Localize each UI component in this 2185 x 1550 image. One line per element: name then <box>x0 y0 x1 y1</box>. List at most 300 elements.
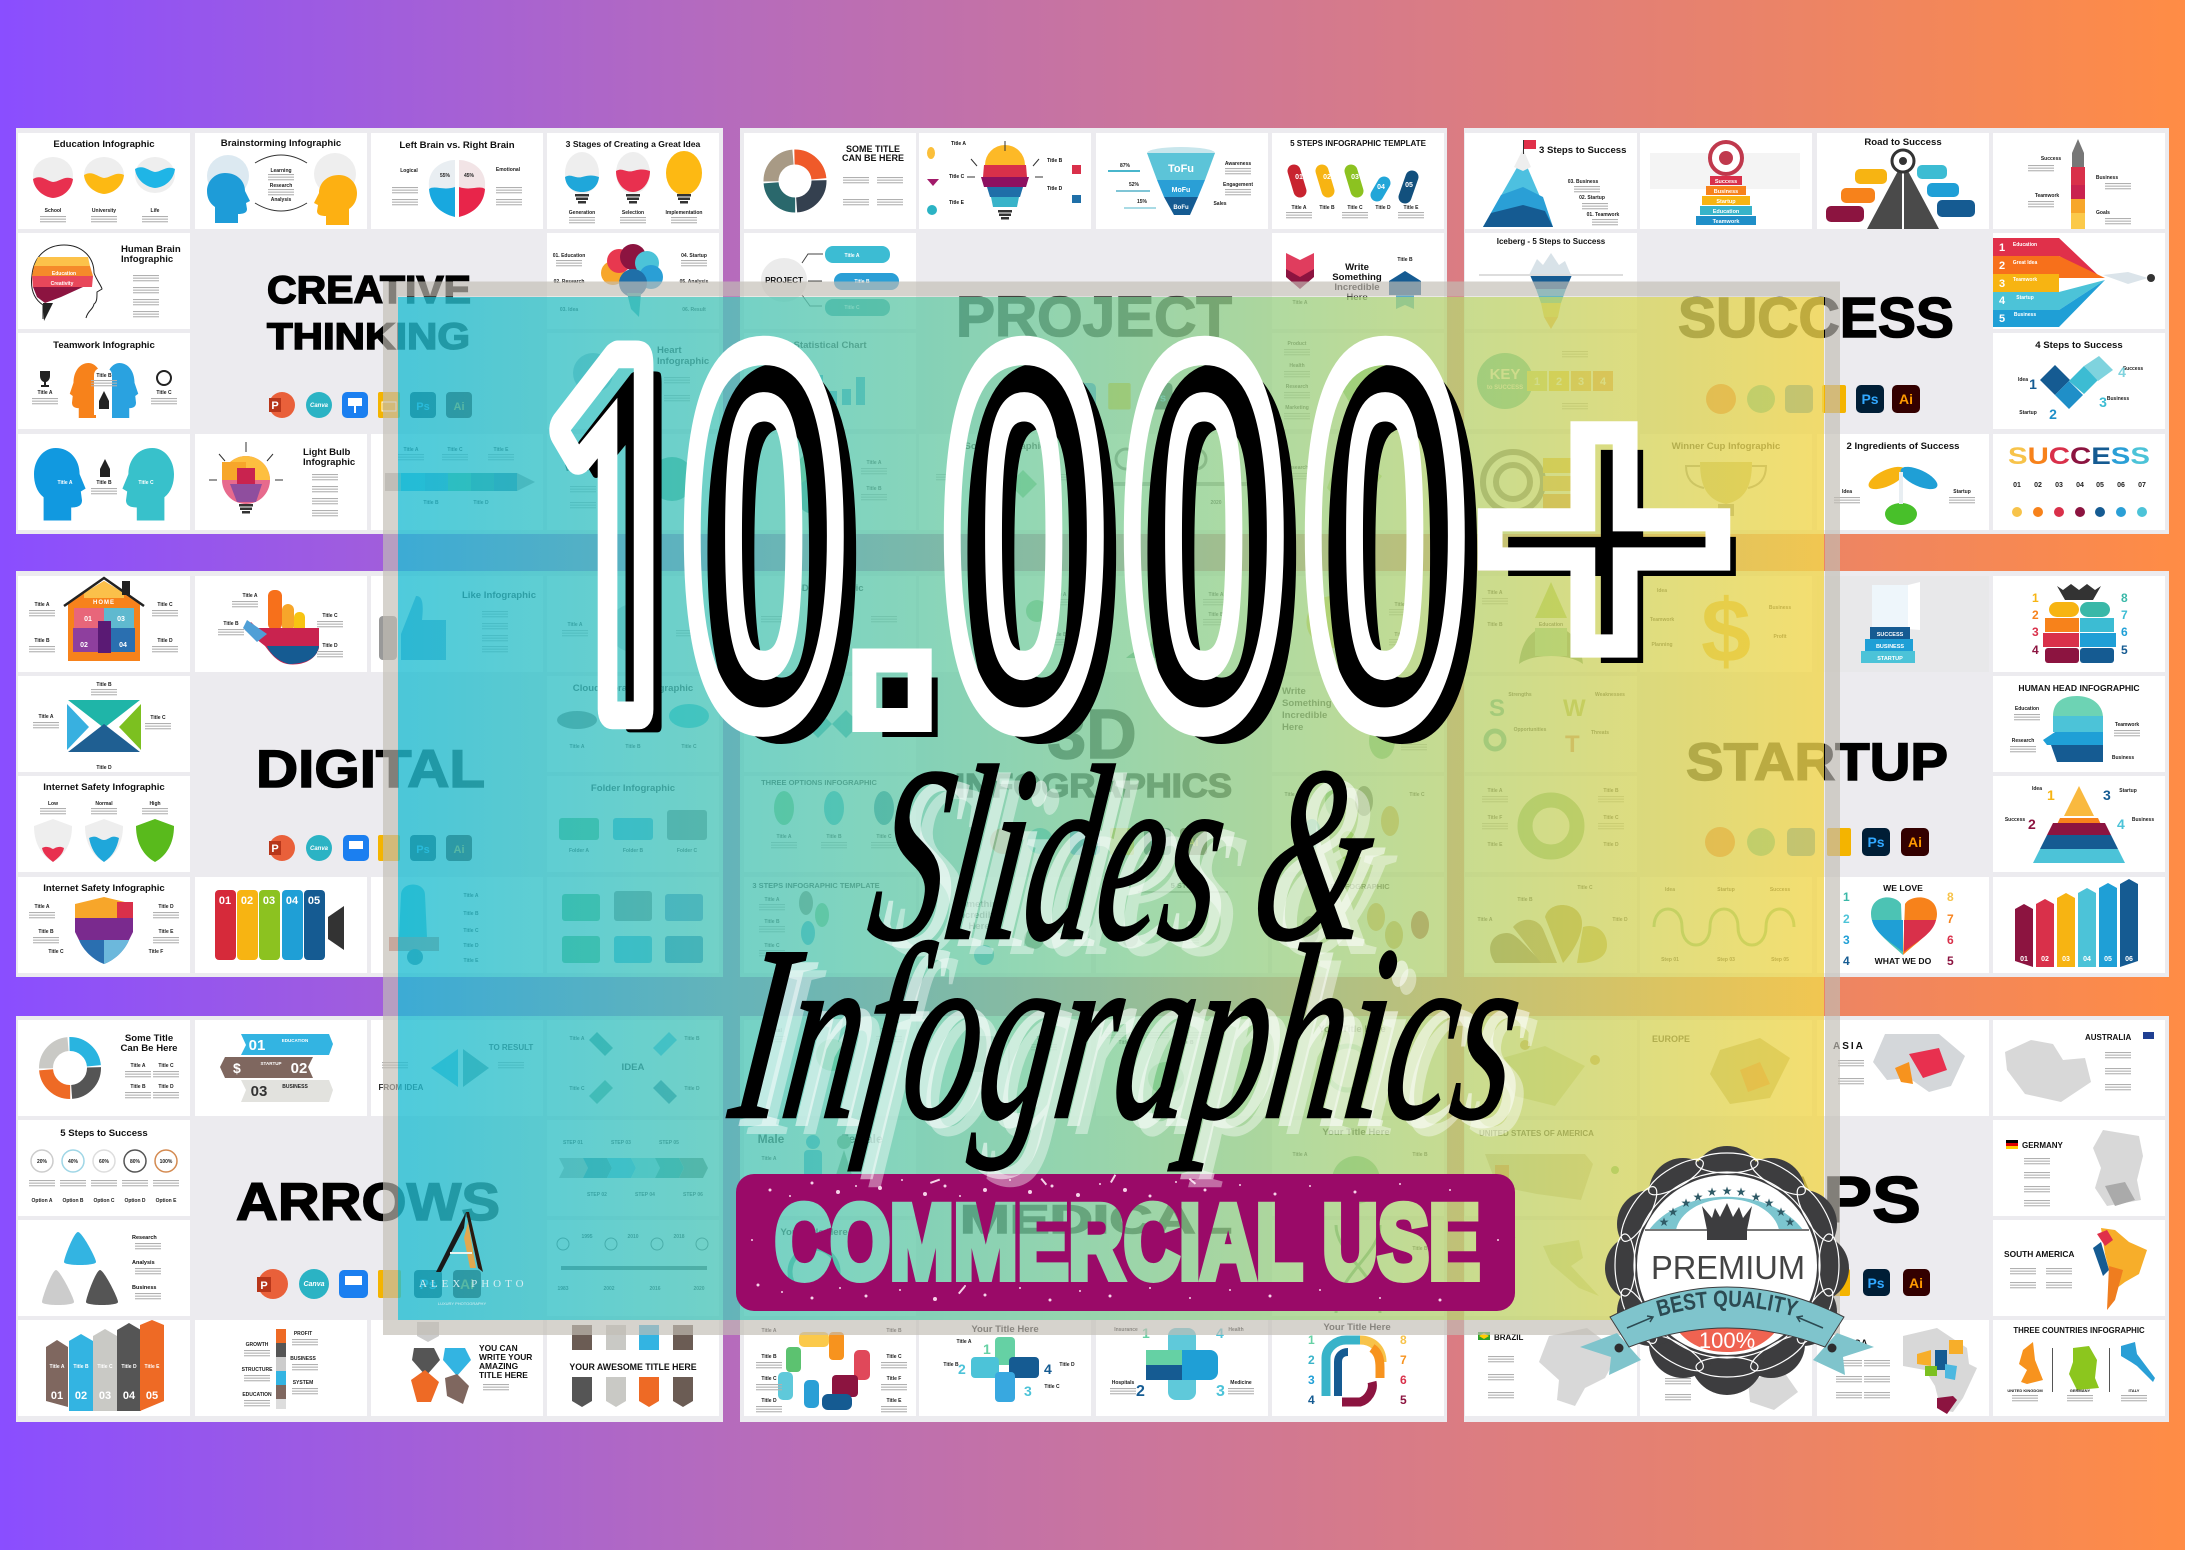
cell: 4 steps to success: Idea <box>2018 377 2028 383</box>
cell: medical diamond cross: 3 <box>1024 1383 1032 1399</box>
cell: some title can be here donut <box>18 1020 190 1116</box>
cell: your title here cross: Title B <box>1412 1152 1428 1158</box>
cell: medical plus: Insurance <box>1114 1327 1138 1333</box>
cell: brainstorming infographic: Learning <box>270 168 292 174</box>
cell: 5 steps infographic template <box>1272 133 1444 229</box>
cell: 5 steps to success: 60% <box>99 1159 110 1165</box>
cell: 5 steps to success: Option D <box>124 1198 146 1204</box>
cell: bubbles <box>1096 877 1268 973</box>
big number: 10.000+: 0 <box>1138 259 1306 846</box>
cell: 5 steps infographic template: Title C <box>1347 205 1363 211</box>
cell: something 3d: Here <box>1282 722 1303 733</box>
cell: video camera bars: 03 <box>263 895 275 907</box>
cell: project pills: Title C <box>844 305 860 311</box>
cell: timeline years: 1983 <box>557 1286 569 1292</box>
cell: 5 steps infographic template: Title A <box>1291 205 1307 211</box>
cell: folder infographic: Folder C <box>677 848 698 854</box>
cell: we love heart: WHAT WE DO <box>1875 956 1932 966</box>
cell: hospital list: Hospital <box>762 1028 782 1034</box>
app icons row: P <box>271 400 279 412</box>
cell: 3 steps to success: 3 Steps to Success <box>1539 145 1626 156</box>
cell: swot: Threats <box>1591 730 1609 736</box>
cell: money bag: 7 <box>2121 608 2128 622</box>
cell: pyramid: Startup <box>2119 788 2137 794</box>
cell: 3d arrow: 3D Infographic <box>796 583 864 594</box>
big number: 10.000+: 0 <box>680 242 848 829</box>
cell: 5 steps to success: Option E <box>156 1198 177 1204</box>
cell: medical eight steps: 8 <box>1400 1333 1407 1347</box>
cell: 4 steps to success: Business <box>2107 396 2129 402</box>
cell: your title here cross: Your Title Here <box>1322 1127 1390 1138</box>
cell: two heads <box>18 434 190 530</box>
cell: target and stairs <box>1640 133 1812 229</box>
cell: product list: Research <box>1286 384 1308 390</box>
cell: 5 steps infographic template: 01 <box>1295 174 1303 181</box>
cell: medical diamond cross: 4 <box>1044 1361 1052 1377</box>
cell: 5 steps to success: Option C <box>93 1198 115 1204</box>
cell: video camera bars: 05 <box>308 895 320 907</box>
cell: tofu mofu bofu funnel: 15% <box>1137 199 1148 205</box>
big number: 10.000+ <box>516 242 1774 846</box>
cell: 5 steps to success: 100% <box>160 1159 173 1165</box>
cell: some infographic <box>919 434 1091 530</box>
cell: tofu mofu bofu funnel: Engagement <box>1223 182 1253 188</box>
cell: three options infographic: Title C <box>876 834 892 840</box>
cell: your title here ring: Your Title Here <box>1318 1024 1386 1035</box>
cell: door and stairs: BUSINESS <box>1876 644 1904 650</box>
cell: vertical arrows <box>195 1320 367 1416</box>
cell: brainstorming infographic <box>195 133 367 229</box>
cell: circle ghost <box>547 576 719 672</box>
badge white center <box>1637 1175 1817 1355</box>
cell: triangles <box>18 1220 190 1316</box>
cell: write something: Write <box>1345 262 1369 273</box>
cell: 2 ingredients of success: 2 Ingredients of Success <box>1846 441 1960 452</box>
cell: 3 steps to success <box>1465 133 1637 229</box>
cell: target and stairs: Business <box>1714 189 1738 195</box>
cell: wave steps: Step 01 <box>1661 957 1679 963</box>
cell: arrows bars 01-05: Title E <box>145 1364 160 1370</box>
cell: we love heart: 1 <box>1843 890 1850 904</box>
cell: envelope title: Title B <box>96 682 112 688</box>
cell: steps arrows: STEP 06 <box>683 1192 703 1198</box>
cell: something we need: Something <box>565 451 615 462</box>
cell: your title here chart <box>744 1220 916 1316</box>
cell: write something: Incredible <box>1334 282 1380 293</box>
cell: vertical arrows: SYSTEM <box>293 1380 313 1386</box>
cell: tofu mofu bofu funnel: BoFu <box>1173 205 1189 211</box>
cell: steps arrows: STEP 02 <box>587 1192 607 1198</box>
cell: something we need <box>547 434 719 530</box>
cell: swot: Strengths <box>1508 692 1532 698</box>
cell: wave steps: Startup <box>1717 887 1735 893</box>
cell: medical plus: Health <box>1228 1327 1244 1333</box>
cell: australia <box>1993 1020 2165 1116</box>
cell: balloon chart <box>919 576 1091 672</box>
cell: bulb bands: Title C <box>949 174 965 180</box>
cell: petals: Title B <box>1517 897 1533 903</box>
cell: arrows bars 01-05 <box>18 1320 190 1416</box>
center heading: startup: STARTUP <box>1686 733 1948 792</box>
big number: 10.000+: 0 <box>1319 259 1487 846</box>
cell: medical plus: 1 <box>1142 1325 1150 1341</box>
cell: your title here cross <box>1272 1120 1444 1216</box>
cell: product list: Marketing <box>1285 405 1309 411</box>
cell: steps arrows: STEP 05 <box>659 1140 679 1146</box>
logo: alex photo: ALEX PHOTO <box>419 1278 528 1290</box>
cell: male female: Female <box>841 1132 883 1146</box>
cell: vertical arrows: GROWTH <box>246 1342 269 1348</box>
cell: 4 steps to success: Startup <box>2019 410 2037 416</box>
cell: circular six steps: Title D <box>1603 842 1619 848</box>
cell: internet safety puzzle shield: Title D <box>158 904 174 910</box>
cell: 4 steps to success: 2 <box>2049 406 2057 422</box>
cell: 2 ingredients of success: Startup <box>1953 489 1971 495</box>
cell: male female: Title B <box>761 1176 777 1182</box>
cell: something 3d <box>1272 676 1444 772</box>
cell: 5 steps to success: 40% <box>68 1159 79 1165</box>
cell: bubbles: 5 STEPS <box>1171 881 1201 890</box>
cell: success letters: 01 <box>2013 482 2021 489</box>
cell: left brain vs right brain: 45% <box>464 173 475 179</box>
cell: six bars: 04 <box>2083 956 2091 963</box>
cell: bulb bands: Title E <box>949 200 965 206</box>
cell: petals: Title C <box>1577 885 1593 891</box>
cell: 3 stages of creating a great idea: Selection <box>622 210 644 216</box>
cell: petals: Title A <box>1477 917 1493 923</box>
cell: medical eight steps: 6 <box>1400 1373 1407 1387</box>
cell: triangles: Analysis <box>132 1260 155 1266</box>
teal arc with stars: ★ <box>1681 1196 1691 1210</box>
cell: money bag: 4 <box>2032 643 2039 657</box>
cell: arrows bars 01-05: 03 <box>99 1390 111 1402</box>
cell: 5 steps infographic template: Title E <box>1404 205 1419 211</box>
cell: petals: Title D <box>1612 917 1628 923</box>
teal arc with stars: ★ <box>1776 1205 1786 1219</box>
cell: pointing hand: Title D <box>322 643 338 649</box>
cell: 5 steps infographic template: Title D <box>1375 205 1391 211</box>
cell: 01 02 03 arrows: 03 <box>251 1083 267 1100</box>
app icons row: Ps <box>1867 1275 1885 1291</box>
cell: tofu mofu bofu funnel <box>1096 133 1268 229</box>
cell: success letters: SUCCESS <box>2008 443 2150 470</box>
cell: colored brain infographic <box>547 233 719 329</box>
cell: 3 steps to success: 03. Business <box>1568 179 1599 185</box>
cell: pointing hand: Title A <box>242 593 258 599</box>
cell: dollar sign: Profit <box>1773 634 1787 640</box>
cell: project pills: PROJECT <box>765 276 803 285</box>
cell: idea: Title B <box>684 1036 700 1042</box>
script heading: slides and infographics: Infographics <box>719 895 1538 1172</box>
app icons row <box>1705 827 1929 857</box>
cell: vertical arrows: STRUCTURE <box>242 1367 273 1373</box>
cell: 4 steps to success <box>1993 333 2165 429</box>
cell: triangles: Research <box>132 1235 157 1241</box>
cell: internet safety puzzle shield: Title E <box>159 929 174 935</box>
cell: door and stairs: STARTUP <box>1877 656 1903 662</box>
cell: 4 steps to success: 1 <box>2029 376 2037 392</box>
cell: wave steps <box>1640 877 1812 973</box>
cell: envelope title: Title D <box>96 765 112 771</box>
cell: some infographic: Some Infographic <box>964 441 1046 452</box>
cell: africa: AFRICA <box>1831 1338 1868 1348</box>
cell: pointing hand: Title C <box>322 613 338 619</box>
teal arc with stars: ★ <box>1668 1205 1678 1219</box>
cell: education pyramid: Title A <box>1487 590 1503 596</box>
cell: door and stairs <box>1817 576 1989 672</box>
cell: pencil steps: Title D <box>473 500 489 506</box>
cell: pyramid: 2 <box>2028 816 2036 832</box>
panel: success <box>1464 128 2169 534</box>
cell: medical eight steps <box>1272 1320 1444 1416</box>
cell: dna <box>1272 1220 1444 1316</box>
cell: arrows bars 01-05: 01 <box>51 1390 63 1402</box>
cell: rocket ribbon: 4 <box>1999 295 2006 307</box>
script heading: slides and infographics: Slides & <box>857 716 1392 993</box>
cell: asia: ASIA <box>1833 1041 1865 1052</box>
cell: 01 02 03 arrows: BUSINESS <box>282 1084 308 1090</box>
cell: iceberg 5 steps: Iceberg - 5 Steps to Success <box>1497 237 1606 246</box>
cell: six bars: 02 <box>2041 956 2049 963</box>
cell: circles chart <box>744 434 916 530</box>
cell: you can write your amazing title here <box>371 1320 543 1416</box>
cell: light bulb infographic <box>195 434 367 530</box>
badge scalloped base <box>1605 1146 1849 1395</box>
teal arc with stars: ★ <box>1707 1185 1717 1199</box>
cell: step list: Title A <box>1208 592 1224 598</box>
ribbon arrows <box>1627 1316 1823 1328</box>
cell: your title here ring <box>1272 1020 1444 1116</box>
cell: target and stairs: Teamwork <box>1713 219 1740 225</box>
cell: tofu mofu bofu funnel: Awareness <box>1225 161 1251 167</box>
cell: we love heart: 6 <box>1947 933 1954 947</box>
cell: target steps <box>1465 434 1637 530</box>
cell: germany: GERMANY <box>2022 1141 2064 1150</box>
cell: medical eight steps: 5 <box>1400 1393 1407 1407</box>
cell: medical cross ring: Title B <box>761 1354 777 1360</box>
cell: timeline: 2017 <box>1130 500 1142 506</box>
cell: six bars: 03 <box>2062 956 2070 963</box>
cell: 5 steps infographic template: 05 <box>1405 182 1413 189</box>
cell: tofu mofu bofu funnel: 87% <box>1120 163 1131 169</box>
cell: check list: Title B <box>1394 632 1410 638</box>
cell: male female: Male <box>758 1132 785 1146</box>
cell: something 3d: Incredible <box>1282 710 1327 721</box>
cell: two heads: Title B <box>96 480 112 486</box>
cell: pencil steps: Title C <box>447 447 463 453</box>
cell: education pyramid: Title B <box>1487 622 1503 628</box>
cell: internet safety puzzle shield: Title C <box>48 949 64 955</box>
cell: three countries infographic <box>1993 1320 2165 1416</box>
cell: brainstorming infographic: Analysis <box>271 197 291 203</box>
cell: dollar sign <box>1640 576 1812 682</box>
panel: medical <box>740 1016 1447 1422</box>
cell: arrows bars 01-05: 04 <box>123 1390 136 1402</box>
app icons row: Ai <box>1909 1275 1923 1291</box>
cell: dna: Title A <box>1294 1246 1310 1252</box>
cell: pyramid: 4 <box>2117 816 2125 832</box>
cell: envelope title: Title A <box>38 714 54 720</box>
cell: human brain infographic: Infographic <box>121 254 174 265</box>
center heading: creative thinking <box>267 269 471 357</box>
cell: medical plus: Medicine <box>1230 1380 1252 1386</box>
big number: 10.000+: 0 <box>1120 242 1288 829</box>
cell: dollar sign: Planning <box>1651 642 1673 648</box>
cell: 3 stages of creating a great idea: Generation <box>569 210 595 216</box>
cell: europe: EUROPE <box>1652 1034 1690 1044</box>
cell: timeline <box>1096 434 1268 530</box>
cell: tofu mofu bofu funnel: 52% <box>1129 182 1140 188</box>
cell: circular six steps: Title B <box>1603 788 1619 794</box>
center heading: creative thinking: CREATIVE <box>267 269 471 312</box>
cell: 3 steps infographic template: Title A <box>764 897 780 903</box>
red 100 percent segment <box>1672 1311 1782 1353</box>
center heading: 3d infographics: INFOGRAPHICS <box>955 767 1232 804</box>
cell: success letters: 06 <box>2117 482 2125 489</box>
cell: 3 steps infographic template: Title B <box>764 919 780 925</box>
cell: petals <box>1465 877 1637 973</box>
translucent gradient overlay panel <box>390 289 1832 1328</box>
cell: brazil: BRAZIL <box>1494 1333 1523 1342</box>
teal arc with stars: ★ <box>1785 1215 1795 1229</box>
cell: 4 steps to success: 4 Steps to Success <box>2035 340 2123 351</box>
cell: united states of america <box>1465 1120 1637 1216</box>
cell: human head infographic: Education <box>2015 706 2039 712</box>
cell: cloud storage infographic: Title B <box>625 744 641 750</box>
cell: balloon chart: Title A <box>1051 592 1067 598</box>
cell: road to success: Road to Success <box>1864 137 1942 148</box>
cell: envelope title <box>18 676 190 772</box>
cell: medical cross ring: Title C <box>761 1376 777 1382</box>
cell: arrows bars 01-05: 05 <box>146 1390 158 1402</box>
cell: timeline years: 2018 <box>673 1234 685 1240</box>
cell: rocket success: Teamwork <box>2035 193 2059 199</box>
cell: folder infographic: Folder B <box>623 848 644 854</box>
cell: write something <box>1272 233 1444 329</box>
cell: money bag: 2 <box>2032 608 2039 622</box>
cell: education pyramid <box>1465 576 1637 672</box>
cell: medical cross ring <box>744 1320 916 1416</box>
cell: brainstorming infographic: Brainstorming Infographic <box>221 138 342 149</box>
cell: medical cross ring: Title B <box>886 1328 902 1334</box>
cell: swot: Opportunities <box>1514 727 1547 733</box>
cell: dollar sign: $ <box>1701 582 1751 682</box>
cell: human brain infographic: Human Brain <box>121 244 181 255</box>
cell: circular six steps: Title F <box>1488 815 1502 821</box>
cell: tofu mofu bofu funnel: MoFu <box>1172 187 1190 194</box>
app icons row: Ps <box>1867 834 1885 850</box>
cell: your awesome title here <box>547 1320 719 1416</box>
cell: rocket ribbon: Business <box>2014 312 2036 318</box>
app icons row: Canva <box>303 1281 325 1288</box>
cell: three options infographic: THREE OPTIONS INFOGRAPHIC <box>761 778 878 787</box>
cell: rocket ribbon: 5 <box>1999 313 2005 325</box>
cell: six bars: 06 <box>2125 956 2133 963</box>
cell: something 3d: Write <box>1282 686 1306 697</box>
cell: 3 steps infographic template <box>744 877 916 973</box>
center heading: digital: DIGITAL <box>256 740 485 799</box>
cell: pyramid: 1 <box>2047 787 2055 803</box>
cell: steps arrows: STEP 04 <box>635 1192 655 1198</box>
panel: creative thinking <box>16 128 723 534</box>
cell: three options infographic <box>744 776 916 872</box>
cell: teamwork infographic <box>18 333 190 429</box>
ribbon text: best quality: BEST QUALITY <box>1656 1290 1799 1316</box>
ribbon <box>1610 1287 1844 1347</box>
cell: wave steps: Success <box>1770 887 1790 893</box>
cell: step list <box>1096 576 1268 672</box>
cell: 2 ingredients of success <box>1817 434 1989 530</box>
app icons row: Ps <box>1861 391 1879 407</box>
cell: door and stairs: SUCCESS <box>1877 632 1904 638</box>
cell: internet safety puzzle shield: Internet Safety Infographic <box>43 883 165 894</box>
cell: your title here chart: Your Title Here <box>780 1227 848 1238</box>
cell: some title can be here donut: CAN BE HERE <box>842 153 904 163</box>
cell: 01 02 03 arrows: STARTUP <box>261 1061 281 1066</box>
cell: folder infographic: Folder Infographic <box>591 783 676 794</box>
cell: circles chart: Title B <box>866 486 882 492</box>
cell: swot <box>1465 676 1637 772</box>
cell: rocket ribbon: 3 <box>1999 278 2005 290</box>
cell: 3 stages of creating a great idea <box>547 133 719 229</box>
cell: internet safety puzzle shield: Title F <box>149 949 163 955</box>
cell: vertical arrows: PROFIT <box>294 1331 312 1337</box>
cell: italy <box>1465 1220 1637 1316</box>
cell: rocket success: Success <box>2041 156 2061 162</box>
app icons row: Ai <box>454 844 464 856</box>
cell: medical plus: 3 <box>1216 1383 1225 1400</box>
cell: medical eight steps: 1 <box>1308 1333 1315 1347</box>
cell: write 3d center: Something <box>954 899 1004 910</box>
cell: left brain vs right brain: Emotional <box>496 167 521 173</box>
cell: folder grid <box>547 877 719 973</box>
cell: human brain infographic <box>18 233 190 329</box>
cell: tofu mofu bofu funnel: ToFu <box>1168 163 1194 175</box>
cell: write something: Title B <box>1397 257 1413 263</box>
cell: circular six steps: Title C <box>1603 815 1619 821</box>
cell: some title can be here donut: Title C <box>158 1063 174 1069</box>
app icons row: Ai <box>1899 391 1913 407</box>
panel: startup <box>1464 571 2169 977</box>
cell: 5 steps infographic template: 5 STEPS INFOGRAPHIC TEMPLATE <box>1290 139 1427 148</box>
center heading: maps: MAPS <box>1709 1163 1921 1236</box>
cell: write something: Here <box>1346 292 1368 303</box>
cell: money bag: 3 <box>2032 625 2039 639</box>
cell: bulb bands: Title A <box>951 141 966 147</box>
cell: 2 ingredients of success: Idea <box>1842 489 1852 495</box>
cell: folder infographic: Folder A <box>569 848 589 854</box>
teal arc with stars: ★ <box>1722 1184 1732 1198</box>
panel: project <box>740 128 1447 534</box>
cell: medical diamond cross: Title A <box>956 1339 972 1345</box>
cell: rocket ribbon: Great Idea <box>2013 260 2037 266</box>
cell: cloud storage infographic: Cloud Storage Infographic <box>573 683 694 694</box>
cell: wave steps: Step 03 <box>1717 957 1735 963</box>
cell: balloon chart: Title B <box>1051 632 1067 638</box>
cell: step list: Title B <box>1208 612 1224 618</box>
app icons row: Ps <box>416 401 430 413</box>
panel: digital <box>16 571 723 977</box>
cell: dna: Title B <box>1412 1246 1428 1252</box>
cell: medical plus: 2 <box>1136 1383 1145 1400</box>
cell: internet safety shields: Internet Safety Infographic <box>43 782 165 793</box>
cell: infographic network <box>1272 877 1444 973</box>
cell: education pyramid: Education <box>1539 622 1563 628</box>
cell: folder infographic <box>547 776 719 872</box>
cell: bell infographic: Title C <box>463 928 479 934</box>
cell: pointing hand <box>195 576 367 672</box>
cell: you can write your amazing title here: TITLE HERE <box>479 1370 528 1380</box>
